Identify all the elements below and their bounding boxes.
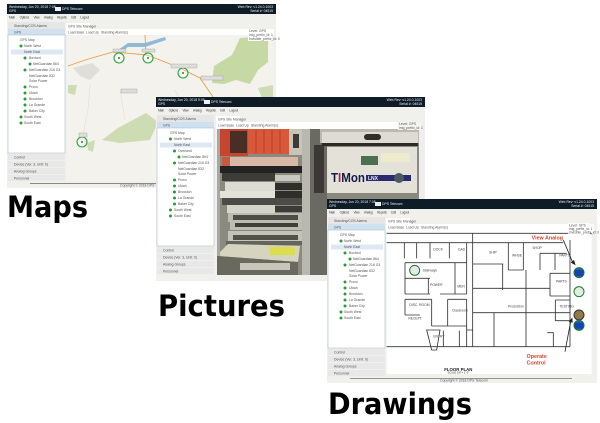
window: pictures screenshot xyxy=(156,97,425,281)
sidebar: GPS Map xyxy=(340,233,355,237)
sidebar: Solar Power xyxy=(349,274,368,278)
window header xyxy=(7,4,276,14)
sidebar: NetGuardian 832 xyxy=(178,167,204,171)
floor plan: PARTS xyxy=(559,254,571,258)
sidebar: Device (Ver. 3, Unit: 0) xyxy=(14,162,48,166)
floor plan title: SCALE 1/8"= 1'-0" xyxy=(447,370,469,374)
sidebar: La Grande xyxy=(349,298,365,302)
window header: DPS Telecom xyxy=(211,100,232,104)
floor plan: ENTRY xyxy=(433,335,445,339)
sidebar: NetGuardian 216 G3 xyxy=(178,161,209,165)
sidebar: Analog Groups xyxy=(334,364,357,368)
window: maps screenshot xyxy=(7,4,280,188)
floor plan xyxy=(387,223,599,374)
window header xyxy=(327,199,597,209)
tabs and toolbar: Load Up xyxy=(86,30,99,34)
floor plan: Level: GPS xyxy=(569,223,587,227)
sidebar: South West xyxy=(344,310,362,314)
equipment rack photo: img_prefix_id: 1 xyxy=(399,126,423,130)
menu bar: Main Options View Analog Reports Edit Logout xyxy=(329,210,409,214)
floor plan: SHIP xyxy=(489,250,498,254)
menu bar: Main Options View Analog Reports Edit Logout xyxy=(158,108,238,112)
sidebar: Brookton xyxy=(178,190,192,194)
sidebar: NetGuardian 864 xyxy=(182,155,208,159)
floor plan: Classroom xyxy=(452,309,468,313)
window header: DPS Telecom xyxy=(382,202,403,206)
sidebar: Baker City xyxy=(29,109,45,113)
sidebar: South West xyxy=(174,208,192,212)
window header: DPS Telecom xyxy=(62,7,83,11)
menu bar: Main Options View Analog Reports Edit Logout xyxy=(9,16,89,20)
sidebar: La Grande xyxy=(29,103,45,107)
tabs and toolbar: GPS Site Manager xyxy=(218,118,247,122)
red equipment xyxy=(218,129,302,166)
sidebar: GPS Map xyxy=(170,131,185,135)
sidebar: Solar Power xyxy=(29,79,48,83)
window header: Serial #: 04515 xyxy=(571,204,594,208)
floor plan: POWER xyxy=(430,283,443,287)
sidebar: Control xyxy=(334,350,345,354)
window header: Serial #: 04515 xyxy=(250,9,273,13)
sidebar: Control xyxy=(14,156,25,160)
sidebar: South East xyxy=(174,214,191,218)
heading: Maps: Maps xyxy=(7,190,88,224)
floor plan title: FLOOR PLAN xyxy=(444,367,472,372)
sidebar: NetGuardian 216 G3 xyxy=(29,68,60,72)
window header: Wednesday, Jun 20, 2018 7:08 xyxy=(9,5,56,9)
map: Invisible_prefix_id: 0 xyxy=(249,37,280,41)
sidebar: South East xyxy=(24,121,41,125)
callout: view analog: View Analog xyxy=(532,235,563,241)
floor plan: SHOP xyxy=(532,246,543,250)
rack shelves xyxy=(217,129,302,275)
sidebar: Provo xyxy=(29,85,38,89)
window header xyxy=(156,97,425,107)
sidebar: Device (Ver. 3, Unit: 0) xyxy=(334,358,368,362)
callout: operate control: Operate xyxy=(527,354,547,360)
map: img_prefix_id: 1 xyxy=(249,33,273,37)
callout: view analog xyxy=(532,235,576,265)
heading: Drawings: Drawings xyxy=(328,387,472,421)
TiMon unit xyxy=(320,129,421,199)
sidebar: Boxford xyxy=(349,251,361,255)
sidebar: GPS xyxy=(14,30,22,34)
sidebar xyxy=(328,217,385,376)
sidebar: Control xyxy=(163,248,174,252)
TiMon unit: TIMon xyxy=(331,170,365,185)
tabs and toolbar: Standing Alarm(s) xyxy=(251,124,278,128)
sidebar: North West xyxy=(344,239,361,243)
tabs and toolbar: GPS Site Manager xyxy=(388,220,417,224)
tabs and toolbar xyxy=(216,116,424,129)
sidebar: Overland xyxy=(178,149,192,153)
equipment rack photo xyxy=(217,122,424,275)
analog/control icons xyxy=(410,265,584,330)
sidebar: Standing/COS Alarms xyxy=(334,219,367,223)
sidebar: GPS xyxy=(334,226,342,230)
sidebar: Standing/COS Alarms xyxy=(163,117,196,121)
tabs and toolbar xyxy=(386,218,594,232)
sidebar: North East xyxy=(174,143,190,147)
sidebar: Ukiah xyxy=(178,184,187,188)
window header: Wednesday, Jun 20, 2018 7:08 xyxy=(329,200,376,204)
sidebar: Standing/COS Alarms xyxy=(14,24,47,28)
sidebar: Brookton xyxy=(349,292,363,296)
sidebar: Device (Ver. 3, Unit: 0) xyxy=(163,256,197,260)
floor plan: RECEPT. xyxy=(408,316,422,320)
floor plan: DISC. ROOM xyxy=(409,303,430,307)
floor plan: WHSE xyxy=(512,254,523,258)
tabs and toolbar: Standing Alarm(s) xyxy=(101,30,128,34)
window header: Web Rev: v1.24.0.1003 xyxy=(387,98,422,102)
sidebar: GPS Map xyxy=(20,38,35,42)
window header: Wednesday, Jun 20, 2018 9:05 xyxy=(158,98,205,102)
tabs and toolbar: Load Up xyxy=(406,226,419,230)
sidebar: NetGuardian 864 xyxy=(33,62,59,66)
sidebar: NetGuardian 864 xyxy=(353,257,379,261)
sidebar: Ukiah xyxy=(29,91,38,95)
sidebar: Boxford xyxy=(29,56,41,60)
floor plan: Invisible_prefix_id: 0 xyxy=(569,231,599,235)
window header: GPS xyxy=(158,102,166,106)
window: drawings screenshot xyxy=(327,199,599,383)
sidebar: GPS xyxy=(163,124,171,128)
TiMon unit: LNX xyxy=(368,176,379,182)
floor plan: MEN xyxy=(457,284,465,288)
tabs and toolbar: GPS Site Manager xyxy=(68,24,97,28)
tabs and toolbar: Load Base xyxy=(218,124,234,128)
sidebar: Personnel xyxy=(14,176,30,180)
sidebar: Personnel xyxy=(334,372,350,376)
callout: operate control: Control xyxy=(527,361,546,367)
floor plan title xyxy=(444,367,472,374)
window header: GPS xyxy=(9,9,17,13)
sidebar: Brookton xyxy=(29,97,43,101)
sidebar: Ukiah xyxy=(349,286,358,290)
sidebar: Analog Groups xyxy=(163,262,186,266)
copyright: Copyright © 2018 DPS Telecom xyxy=(120,184,168,188)
sidebar: Analog Groups xyxy=(14,170,37,174)
sidebar: South West xyxy=(24,115,42,119)
floor plan: DOCK xyxy=(433,248,444,252)
sidebar: Baker City xyxy=(349,304,365,308)
floor plan: img_prefix_id: 1 xyxy=(569,227,593,231)
window header: Web Rev: v1.24.0.1003 xyxy=(559,200,594,204)
sidebar: Solar Power xyxy=(178,172,197,176)
sidebar xyxy=(157,115,214,274)
sidebar: La Grande xyxy=(178,196,194,200)
equipment rack photo: Level: GPS xyxy=(399,122,417,126)
window header: Serial #: 04515 xyxy=(399,102,422,106)
window header: GPS xyxy=(329,204,337,208)
sidebar: Provo xyxy=(178,178,187,182)
sidebar: North East xyxy=(344,245,360,249)
floor plan: Stairways xyxy=(423,269,437,273)
callout: operate control xyxy=(527,317,573,367)
tabs and toolbar: Load Up xyxy=(236,124,249,128)
tabs and toolbar xyxy=(66,23,274,35)
sidebar: South East xyxy=(344,316,361,320)
sidebar xyxy=(8,22,65,181)
tabs and toolbar: Load Base xyxy=(68,30,84,34)
copyright: Copyright © 2018 DPS Telecom xyxy=(440,378,488,382)
map: Level: GPS xyxy=(249,29,267,33)
floor plan: PARTS xyxy=(556,280,568,284)
floor plan: TESTING xyxy=(559,304,574,308)
sidebar: NetGuardian 832 xyxy=(349,269,375,273)
sidebar: NetGuardian 832 xyxy=(29,74,55,78)
tabs and toolbar: Standing Alarm(s) xyxy=(421,226,448,230)
heading: Pictures: Pictures xyxy=(158,289,285,323)
map markers xyxy=(77,53,188,147)
sidebar: Provo xyxy=(349,280,358,284)
map xyxy=(67,29,280,181)
floor plan: GAS xyxy=(458,248,466,252)
sidebar: Personnel xyxy=(163,270,179,274)
sidebar: North East xyxy=(24,50,40,54)
tabs and toolbar: Load Base xyxy=(388,226,404,230)
floor plan: Production xyxy=(508,304,524,308)
window header: Web Rev: v1.24.0.1003 xyxy=(238,5,273,9)
sidebar: NetGuardian 216 G3 xyxy=(349,263,380,267)
sidebar: Baker City xyxy=(178,202,194,206)
sidebar: North West xyxy=(24,44,41,48)
sidebar: North West xyxy=(174,137,191,141)
